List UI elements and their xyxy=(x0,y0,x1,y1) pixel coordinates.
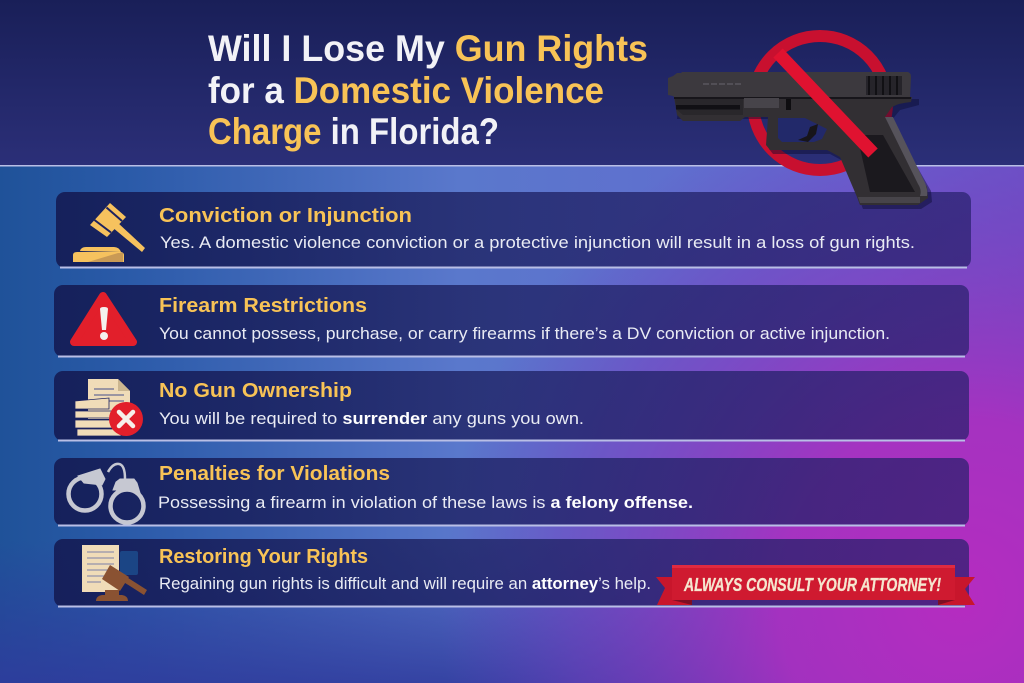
text: Possessing a firearm in violation of these laws is a felony offense. xyxy=(158,493,693,512)
panel: penalties for violations xyxy=(54,458,969,526)
heading: Penalties for Violations xyxy=(159,462,390,485)
panel: conviction or injunction xyxy=(56,192,971,268)
panel: firearm restrictions xyxy=(54,285,969,357)
callout ribbon: ALWAYS CONSULT YOUR ATTORNEY! xyxy=(683,575,941,595)
heading: No Gun Ownership xyxy=(159,379,352,402)
title: Will I Lose My Gun Rights xyxy=(208,28,648,69)
heading: Firearm Restrictions xyxy=(159,294,367,317)
header band xyxy=(0,0,1024,166)
title xyxy=(208,28,648,152)
frame and grip xyxy=(674,97,928,205)
backstrap xyxy=(885,117,927,196)
icon: handgun xyxy=(668,72,932,209)
text: You will be required to surrender any guns you own. xyxy=(159,409,584,428)
icon: handcuffs xyxy=(68,464,144,522)
icon: documents with x xyxy=(75,379,143,436)
trigger xyxy=(798,124,818,142)
slide serrations xyxy=(866,76,902,95)
heading: Restoring Your Rights xyxy=(159,545,368,568)
icon: prohibition slash xyxy=(778,53,873,153)
title: for a Domestic Violence xyxy=(208,70,604,111)
icon: warning triangle xyxy=(74,296,133,342)
callout ribbon xyxy=(656,565,975,605)
text: You cannot possess, purchase, or carry firearms if there’s a DV conviction or active injunction. xyxy=(159,324,890,343)
frame shade xyxy=(675,99,743,115)
icon: document and gavel xyxy=(82,545,147,601)
icon: prohibition sign xyxy=(753,36,887,170)
text: Regaining gun rights is difficult and will require an attorney’s help. xyxy=(159,574,651,593)
grip panel xyxy=(857,135,915,192)
shadow xyxy=(677,99,932,209)
icon: gavel xyxy=(73,203,145,262)
panel: no gun ownership xyxy=(54,371,969,441)
title: Charge in Florida? xyxy=(208,111,499,152)
heading: Conviction or Injunction xyxy=(159,204,412,227)
trigger guard opening xyxy=(778,118,827,142)
slide xyxy=(668,72,911,98)
text: Yes. A domestic violence conviction or a protective injunction will result in a loss of gun rights. xyxy=(160,233,915,252)
panel: restoring your rights xyxy=(54,539,969,607)
